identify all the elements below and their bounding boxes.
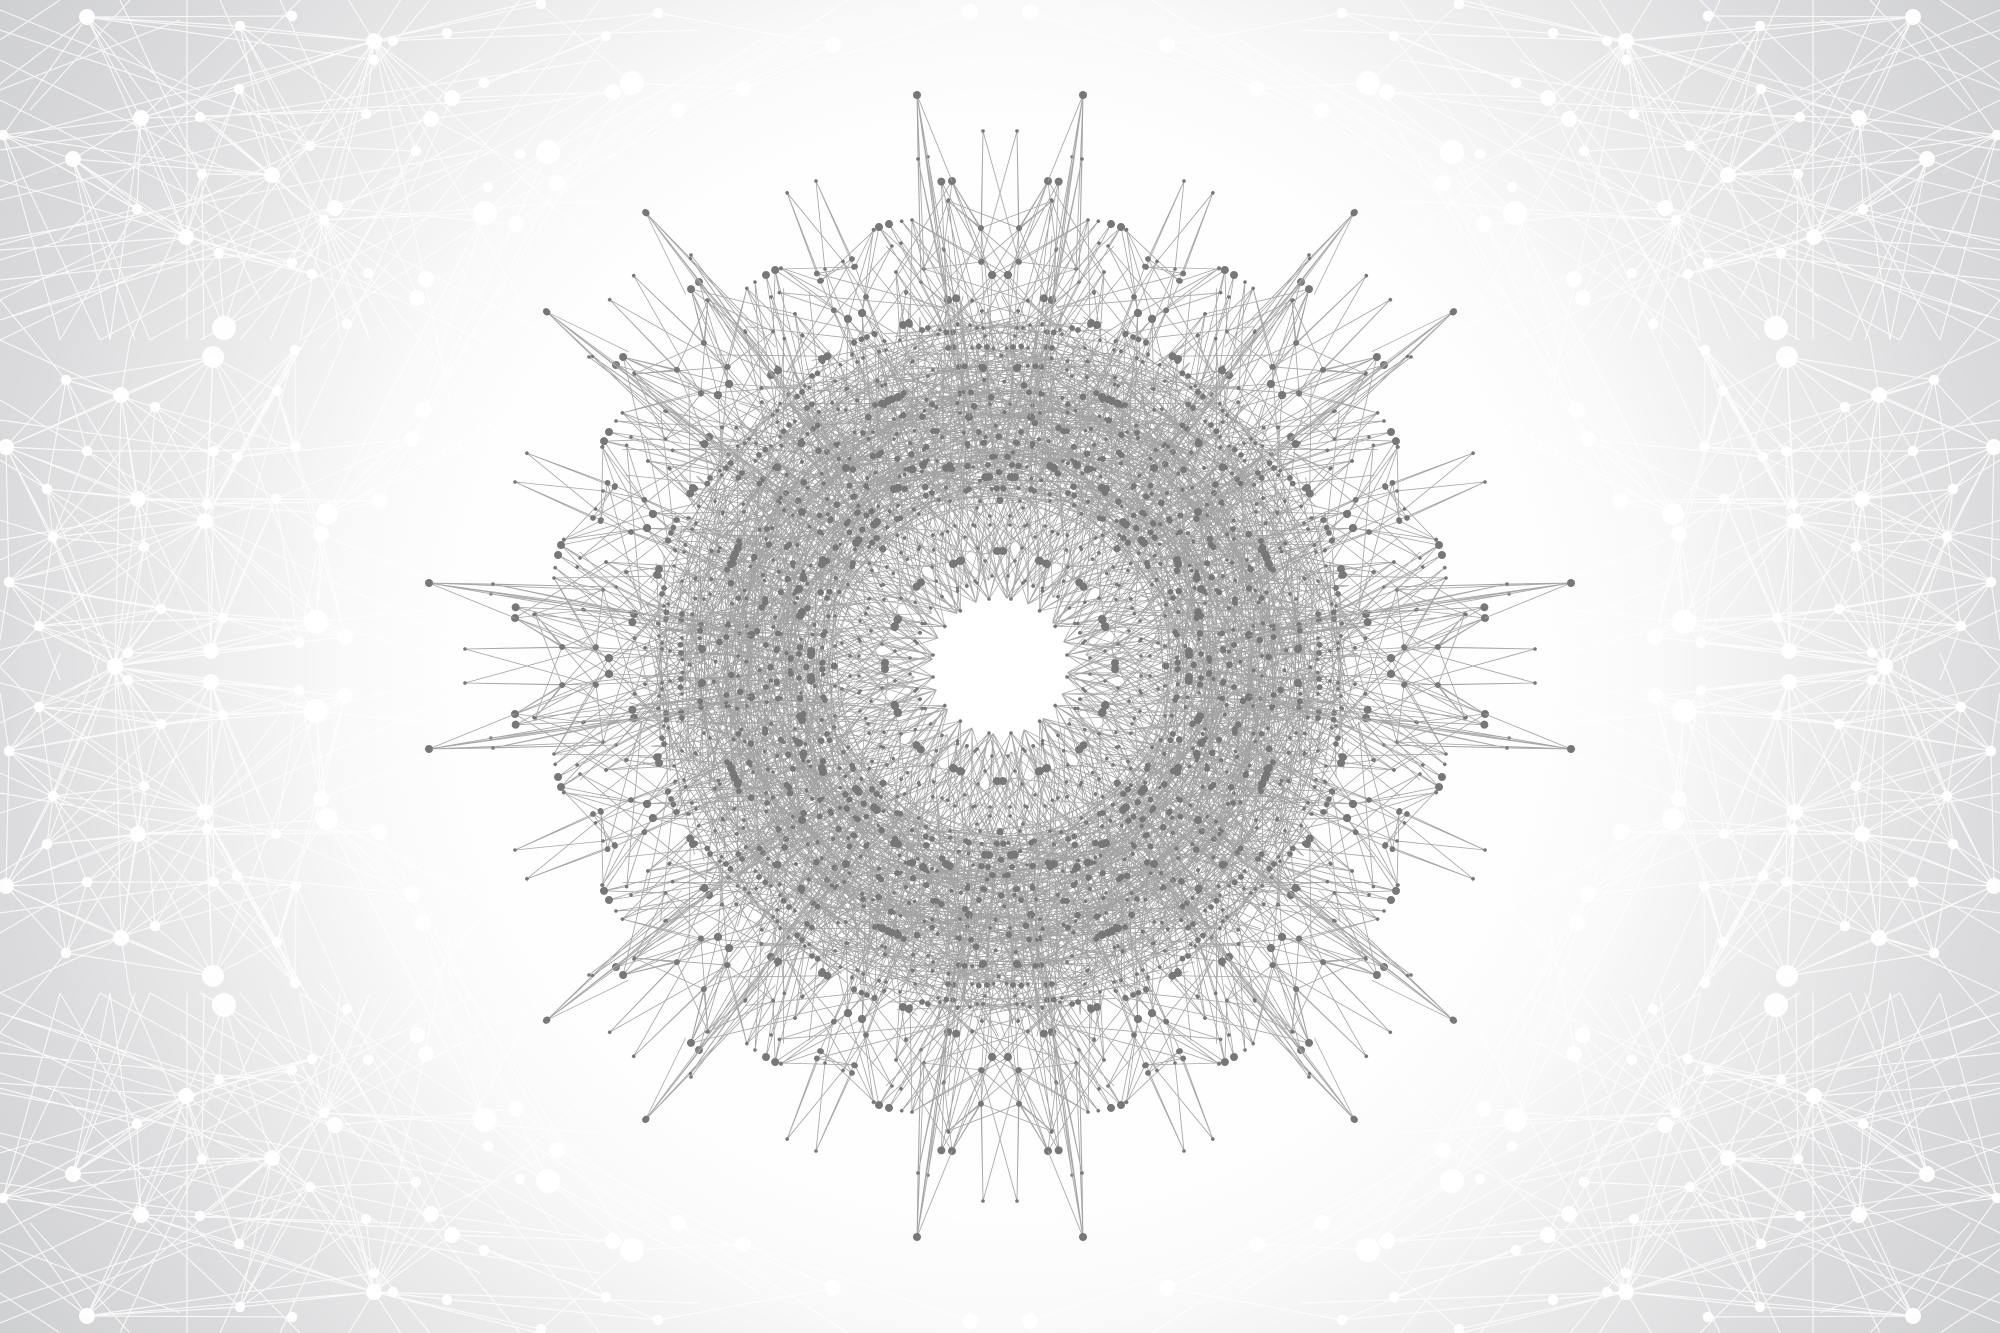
central radial network: [331, 0, 1669, 1333]
long spike tips at the axes: [429, 95, 1571, 1237]
outer star lines: [331, 0, 1669, 1333]
tangential ring chords: [491, 157, 1509, 1175]
network nodes: [331, 0, 1669, 1333]
transition lines between ring and spikes: [415, 81, 1585, 1251]
radial ring lines: [548, 214, 1452, 1118]
inner fan lines around the central hole: [722, 388, 1278, 944]
long spike tips at the diagonals: [547, 213, 1453, 1119]
